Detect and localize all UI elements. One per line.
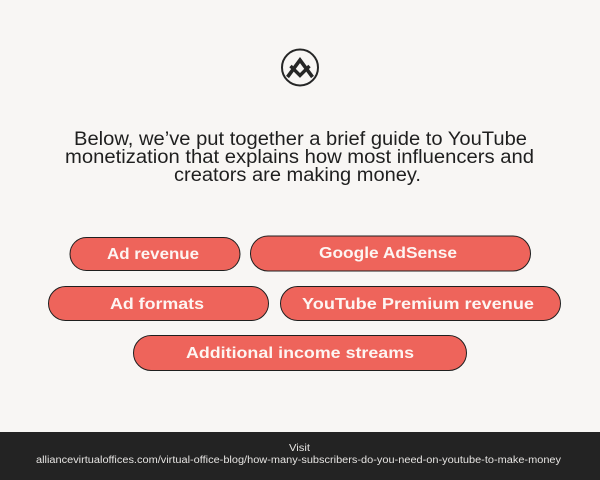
- footer bar: [0, 432, 600, 480]
- button: Ad revenue: Ad revenue: [107, 246, 199, 263]
- button: Ad revenue: [70, 238, 240, 270]
- button: Additional income streams: [134, 336, 466, 370]
- footer text: Visit: [289, 443, 310, 454]
- button: YouTube Premium revenue: YouTube Premium revenue: [302, 296, 534, 313]
- button: Ad formats: Ad formats: [110, 296, 204, 313]
- intro text: [65, 129, 534, 186]
- footer text: [36, 443, 561, 466]
- button: Google AdSense: Google AdSense: [319, 245, 457, 262]
- button: Additional income streams: Additional income streams: [186, 345, 414, 362]
- button: Ad formats: [48, 286, 268, 320]
- intro text: creators are making money.: [174, 165, 421, 186]
- intro text: Below, we’ve put together a brief guide to YouTube: [74, 129, 527, 150]
- icon: logo: [282, 50, 318, 86]
- button: Google AdSense: [250, 236, 530, 271]
- footer text: alliancevirtualoffices.com/virtual-office-blog/how-many-subscribers-do-you-need-on-youtube-to-make-money: [36, 455, 561, 466]
- intro text: monetization that explains how most influencers and: [65, 147, 534, 168]
- button: YouTube Premium revenue: [280, 286, 560, 320]
